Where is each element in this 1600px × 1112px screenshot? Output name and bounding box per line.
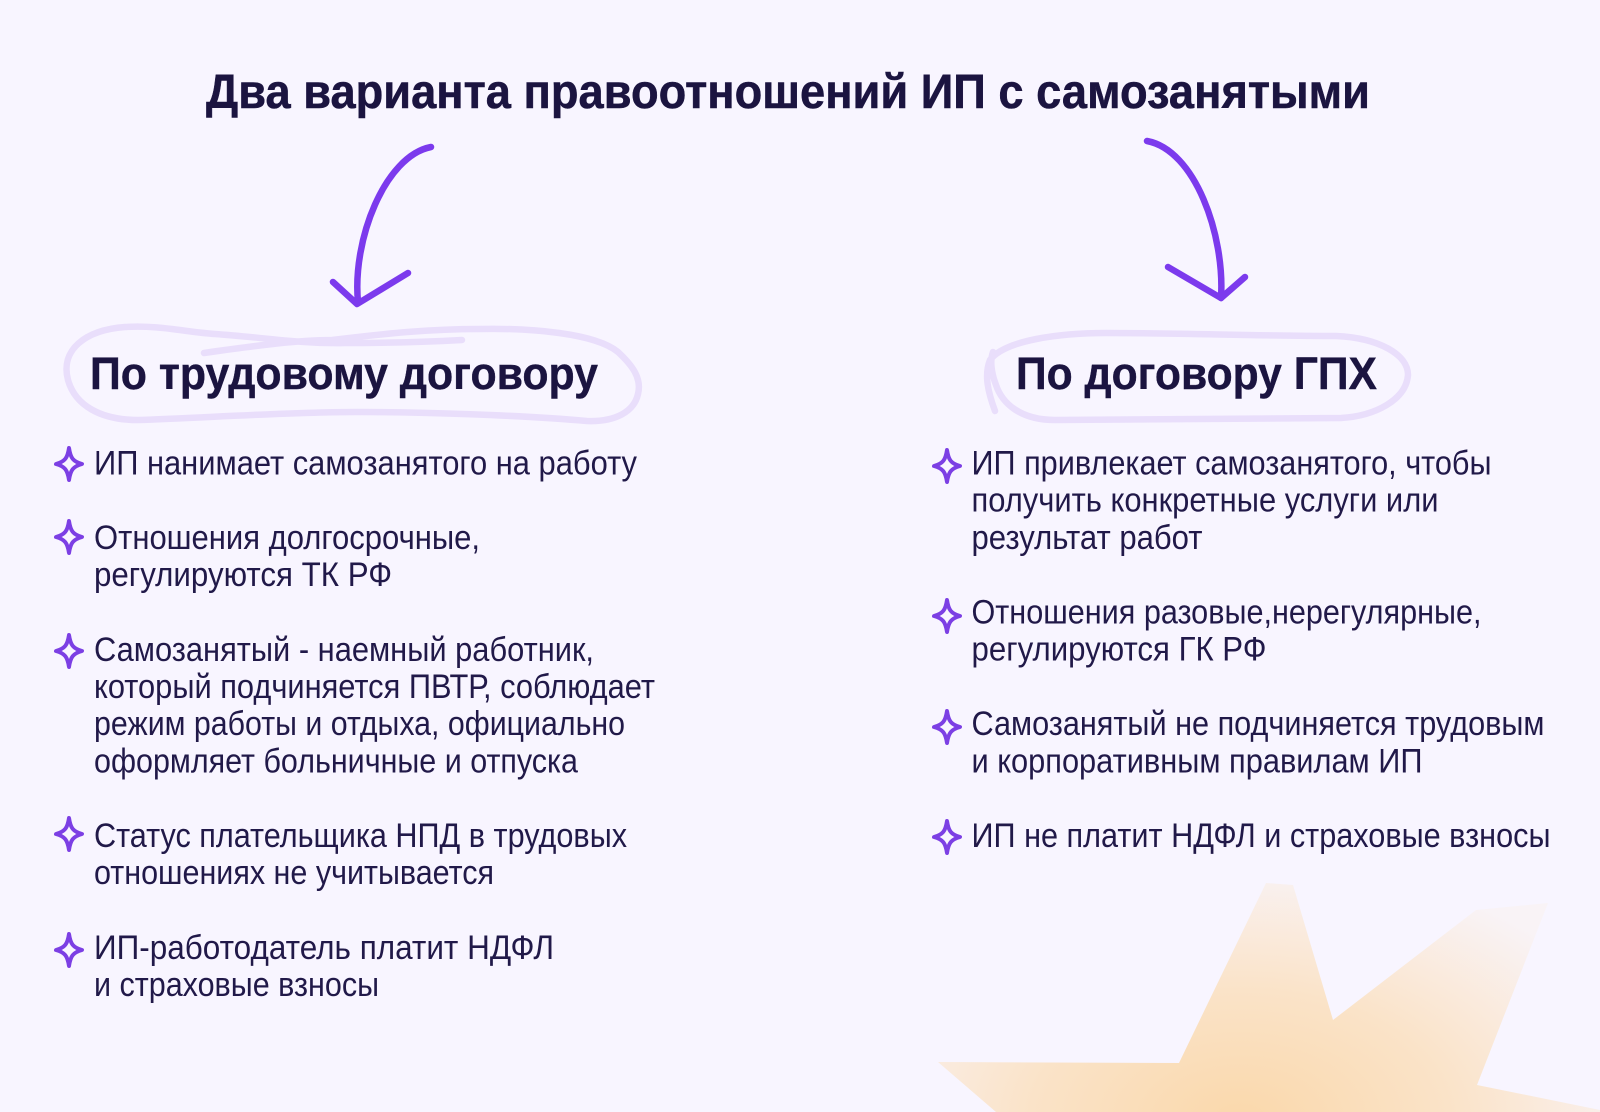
- item 1: [934, 444, 1492, 557]
- item 3: Самозанятый не подчиняется трудовым: [972, 705, 1544, 743]
- item 1: ИП привлекает самозанятого, чтобы: [972, 444, 1492, 482]
- item 5: ИП-работодатель платит НДФЛ: [94, 929, 554, 967]
- left list: [56, 444, 655, 1004]
- item 4: [56, 817, 627, 892]
- item 3: режим работы и отдыха, официально: [94, 705, 625, 743]
- item 5: и страховые взносы: [94, 966, 379, 1004]
- item 4: ИП не платит НДФЛ и страховые взносы: [972, 817, 1550, 855]
- arrow: to civil contract: [1147, 141, 1245, 298]
- item 3: и корпоративным правилам ИП: [972, 742, 1422, 780]
- item 3: [934, 705, 1544, 780]
- heading: civil contract: [987, 333, 1408, 420]
- title: Два варианта правоотношений ИП с самозанятыми: [206, 66, 1370, 119]
- item 2: [934, 594, 1482, 668]
- hand-drawn loop: employment contract: [67, 327, 639, 421]
- item 2: регулируются ТК РФ: [94, 556, 392, 594]
- item 4: отношениях не учитывается: [94, 854, 494, 892]
- item 2: Отношения разовые,нерегулярные,: [972, 594, 1482, 632]
- heading: employment contract: [67, 327, 639, 421]
- item 1: результат работ: [972, 519, 1202, 557]
- item 2: [56, 519, 480, 594]
- item 3: [56, 631, 655, 780]
- item 3: который подчиняется ПВТР, соблюдает: [94, 668, 655, 706]
- item 5: [56, 929, 554, 1004]
- heading text: По договору ГПХ: [1016, 348, 1377, 399]
- arrow: to employment contract: [333, 147, 431, 304]
- item 2: регулируются ГК РФ: [972, 630, 1266, 668]
- right list: [934, 444, 1550, 855]
- item 2: Отношения долгосрочные,: [94, 519, 480, 557]
- item 1: ИП нанимает самозанятого на работу: [94, 444, 637, 482]
- item 4: Статус плательщика НПД в трудовых: [94, 817, 627, 855]
- item 3: оформляет больничные и отпуска: [94, 742, 578, 780]
- hand-drawn loop: civil contract: [987, 333, 1408, 420]
- heading text: По трудовому договору: [90, 348, 598, 399]
- item 3: Самозанятый - наемный работник,: [94, 631, 594, 669]
- item 1: получить конкретные услуги или: [972, 482, 1438, 520]
- decorative star shape: [938, 883, 1600, 1112]
